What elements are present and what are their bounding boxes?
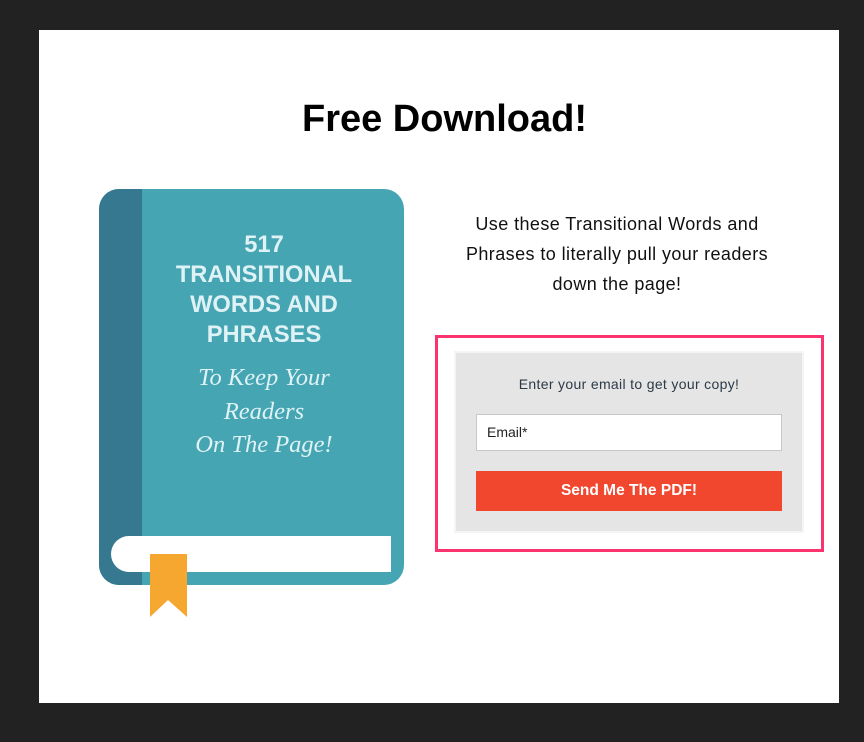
book title: WORDS AND (190, 292, 338, 318)
intro text: down the page! (552, 274, 681, 294)
book subtitle (195, 364, 333, 458)
book title: 517 (244, 232, 284, 258)
panel: signup highlight box (435, 335, 824, 552)
email input (476, 414, 782, 451)
submit button: Send Me The PDF! (561, 482, 697, 499)
submit button (476, 471, 782, 511)
panel: email form (454, 351, 804, 533)
intro text: Use these Transitional Words and (475, 214, 759, 234)
book title: PHRASES (207, 322, 321, 348)
email input: Email* (487, 424, 527, 440)
book shape (99, 189, 404, 617)
form prompt: Enter your email to get your copy! (519, 376, 739, 392)
intro text (466, 214, 768, 294)
intro text: Phrases to literally pull your readers (466, 244, 768, 264)
book subtitle: To Keep Your (198, 364, 330, 391)
book subtitle: Readers (224, 398, 304, 424)
book title (176, 232, 352, 348)
title: Free Download! (302, 98, 587, 140)
book subtitle: On The Page! (195, 431, 333, 458)
book title: TRANSITIONAL (176, 262, 352, 288)
icon: book cover illustration (99, 189, 404, 617)
